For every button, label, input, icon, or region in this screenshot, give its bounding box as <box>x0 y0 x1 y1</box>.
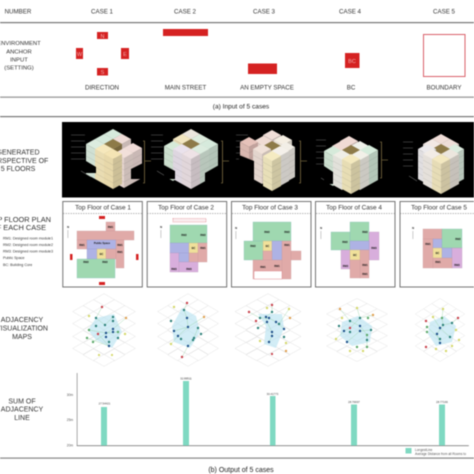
adjacency map case 2 <box>158 294 218 366</box>
adjacency map case 4 <box>327 298 387 362</box>
panel: floor plan case 4: RM3 <box>371 246 377 250</box>
panel: floor plan case 1: RM2 <box>102 260 108 264</box>
panel: black perspective strip <box>62 122 474 198</box>
panel: floor plan case 3: BC <box>266 244 269 248</box>
header row <box>5 8 456 16</box>
panel: floor plan case 2: RM3 <box>186 267 192 271</box>
panel: floor plan case 2: RM2 <box>200 233 206 237</box>
row label: adjacency maps: MAPS <box>12 334 32 341</box>
panel: floor plan case 1: RM1 <box>117 250 123 254</box>
header row: CASE 3 <box>253 8 276 16</box>
panel: floor plan case 2: N <box>160 225 162 229</box>
panel: floor plan case 5: RM1 <box>425 242 431 246</box>
panel: floor plan case 1: RM1 <box>108 225 114 229</box>
bar chart: sum of adjacency line: 25m <box>67 418 73 422</box>
panel: floor plan case 4 <box>316 202 395 287</box>
panel: floor plan case 2: Top Floor of Case 2 <box>158 204 214 212</box>
input labels <box>85 84 461 92</box>
case 1 input: direction anchors: N <box>101 34 105 40</box>
case 3 input: empty space <box>248 64 277 74</box>
bar: case 1 <box>101 407 107 446</box>
chart legend: Average Distance from all Rooms to <box>415 452 466 456</box>
adjacency map case 3 <box>235 294 301 366</box>
adjacency map case 1 <box>73 294 135 366</box>
caption b: (b) Output of 5 cases <box>208 467 274 474</box>
plan legend <box>3 236 53 267</box>
case 1 input: direction anchors <box>76 32 129 76</box>
panel: floor plan case 2 <box>147 202 227 287</box>
input labels: MAIN STREET <box>165 84 207 92</box>
perspective case 5 <box>403 134 464 194</box>
panel: floor plan case 5: RM1 <box>435 260 441 264</box>
bar: case 2 <box>183 381 189 446</box>
row label: sum of adjacency line: LINE <box>14 415 30 422</box>
caption a: (a) Input of 5 cases <box>213 104 270 110</box>
panel: floor plan case 5: RM2 <box>455 237 461 241</box>
panel: floor plan case 4: RM2 <box>362 230 368 234</box>
header row: NUMBER <box>5 8 32 16</box>
input labels: DIRECTION <box>85 84 119 92</box>
perspective case 2 <box>151 129 229 189</box>
bar values <box>99 376 448 406</box>
row label: adjacency maps: ADJACENCY <box>1 317 44 324</box>
case 1 input: direction anchors: S <box>101 70 105 76</box>
panel: floor plan case 1: N <box>67 225 69 229</box>
input labels: AN EMPTY SPACE <box>240 84 294 92</box>
row label: perspective: 5 FLOORS <box>1 166 36 173</box>
perspective case 4 <box>316 136 388 194</box>
header row: CASE 4 <box>339 8 362 16</box>
bar values: 30.41773 <box>267 392 279 396</box>
case 2 input: main street <box>163 29 208 36</box>
panel: floor plan case 3 <box>232 202 311 287</box>
case 5 input: boundary <box>424 34 465 76</box>
plan legend: BC: Building Core <box>3 263 32 267</box>
panel: floor plan case 1: RM2 <box>83 260 89 264</box>
case 1 input: direction anchors: E <box>123 52 127 58</box>
panel: floor plan case 4: RM1 <box>362 272 368 276</box>
panel: floor plan case 3: RM1 <box>260 265 266 269</box>
row label: sum of adjacency line: ADJACENCY <box>1 406 44 414</box>
case 4 input: BC <box>345 53 360 68</box>
input labels: BOUNDARY <box>427 84 461 92</box>
bar: case 5 <box>439 404 445 446</box>
panel: floor plan case 3: RM2 <box>264 230 270 234</box>
panel: floor plan case 4: N <box>320 226 322 230</box>
case 1 input: direction anchors: W <box>77 52 83 58</box>
panel: floor plan case 2: RM3 <box>171 267 177 271</box>
panel: floor plan case 3: RM1 <box>284 243 290 247</box>
header row: CASE 2 <box>174 8 197 16</box>
panel: floor plan case 5: Top Floor of Case 5 <box>411 204 467 212</box>
panel: floor plan case 4: RM2 <box>342 240 348 244</box>
panel: floor plan case 4: RM3 <box>343 264 349 268</box>
panel: floor plan case 2: RM2 <box>181 233 187 237</box>
row label: environment anchor input: INPUT <box>10 58 28 64</box>
panel: floor plan case 4: BC <box>353 253 357 257</box>
bar values: 27.54421 <box>99 402 111 406</box>
panel: floor plan case 5: RM3 <box>454 263 460 267</box>
bar: case 3 <box>270 396 276 446</box>
panel: floor plan case 3: RM1 <box>274 264 280 268</box>
panel: floor plan case 3: RM2 <box>250 244 256 248</box>
bar values: 32.88511 <box>180 376 192 380</box>
plan legend: RM2: Designed room module2 <box>3 243 53 247</box>
row label: sum of adjacency line: SUM OF <box>8 398 36 406</box>
panel: floor plan case 3: Top Floor of Case 3 <box>242 204 298 212</box>
panel: floor plan case 1: Public Space <box>94 241 111 245</box>
bar: case 4 <box>351 404 357 446</box>
header row: CASE 1 <box>91 8 114 16</box>
plan legend: Public Space <box>3 256 25 260</box>
header row: CASE 5 <box>433 8 456 16</box>
chart legend <box>406 448 466 456</box>
plan legend: RM3: Designed room module3 <box>3 250 53 254</box>
row label: environment anchor input: (SETTING) <box>4 66 34 72</box>
panel: floor plan case 5 <box>400 202 474 287</box>
panel: floor plan case 5: BC <box>436 251 439 255</box>
bar chart: sum of adjacency line <box>67 373 469 448</box>
perspective case 1 <box>71 129 151 189</box>
panel: floor plan case 5: N <box>412 226 414 230</box>
panel: floor plan case 1: RM1 <box>117 243 123 247</box>
panel: floor plan case 1: BC <box>100 252 103 256</box>
panel: floor plan case 2: BC <box>192 246 195 250</box>
bar chart: sum of adjacency line: 20m <box>67 444 73 448</box>
bar chart: sum of adjacency line: 30m <box>67 393 73 397</box>
case 4 input: BC: BC <box>348 59 356 65</box>
input labels: BC <box>347 84 356 92</box>
chart legend: LongestLine <box>415 448 433 452</box>
panel: floor plan case 1: RM1 <box>79 243 85 247</box>
perspective case 3 <box>236 130 307 191</box>
row label: environment anchor input: ANCHOR <box>6 50 32 56</box>
panel: floor plan case 3: RM2 <box>284 230 290 234</box>
panel: floor plan case 4: Top Floor of Case 4 <box>326 204 382 212</box>
panel: floor plan case 2: RM1 <box>200 246 206 250</box>
bar values: 28.77166 <box>436 400 448 404</box>
adjacency map case 5 <box>415 298 465 362</box>
panel: floor plan case 4: RM1 <box>362 263 368 267</box>
panel: floor plan case 1 <box>63 202 142 287</box>
bar values: 28.76697 <box>348 400 360 404</box>
panel: floor plan case 3: N <box>235 226 237 230</box>
plan legend: RM1: Designed room module1 <box>3 236 53 240</box>
panel: floor plan case 1: Top Floor of Case 1 <box>75 204 131 212</box>
